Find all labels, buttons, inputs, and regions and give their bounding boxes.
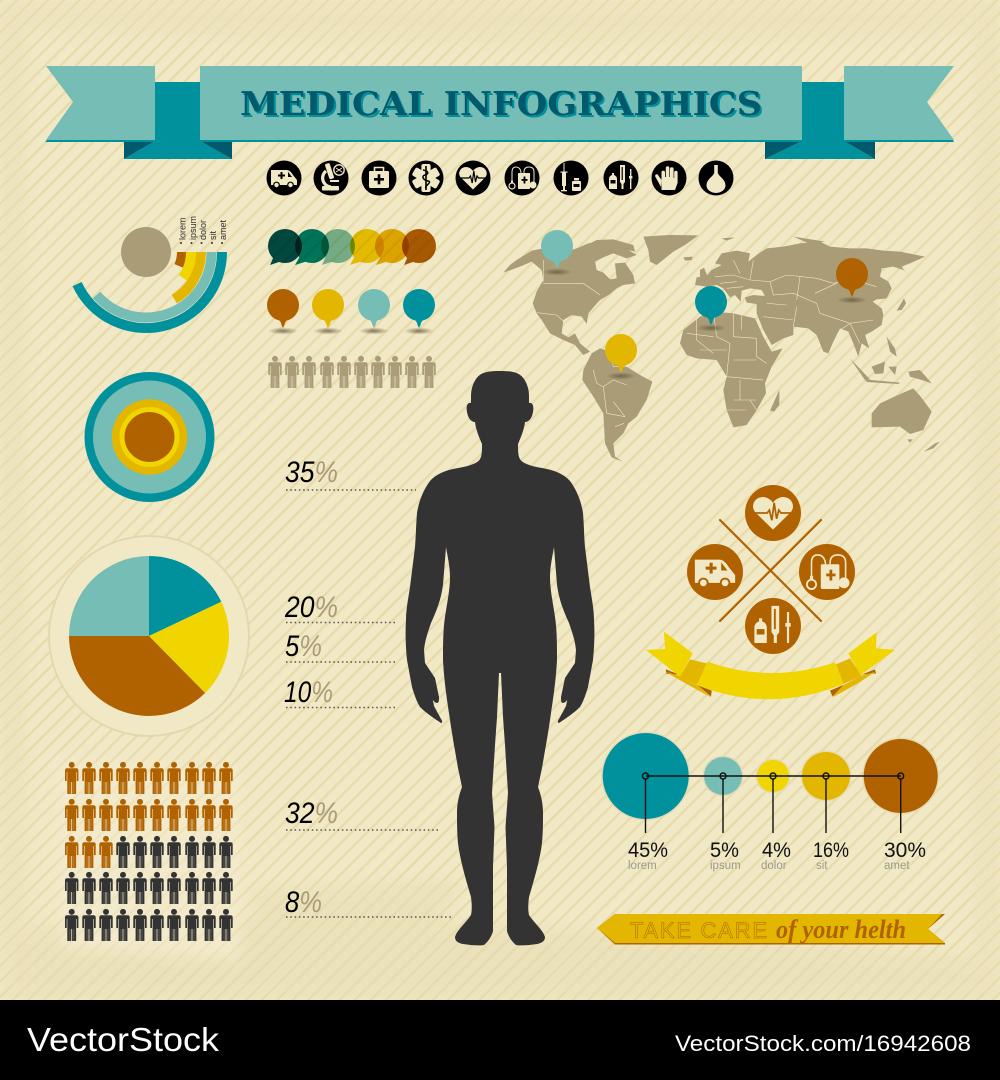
pin: light teal <box>358 289 390 335</box>
pin: yellow <box>312 289 344 335</box>
bubble comparison chart <box>601 732 939 872</box>
icon: bottles <box>604 160 638 196</box>
pin: africa <box>695 286 727 332</box>
south america <box>582 348 652 462</box>
africa <box>680 312 783 427</box>
arc: sit <box>97 252 212 317</box>
category labels: lorem <box>628 860 657 872</box>
icon: iv bag <box>799 544 855 600</box>
label 20%: 20% <box>284 591 338 624</box>
icon: heart <box>745 485 801 541</box>
yellow ribbon <box>646 632 895 699</box>
category labels: ipsum <box>710 860 741 872</box>
banner text: of your helth <box>776 915 906 944</box>
arc: ipsum <box>183 252 191 278</box>
bubble 4 <box>350 229 384 265</box>
icon: first aid kit <box>362 160 396 196</box>
footer logo: VectorStock <box>27 1022 219 1059</box>
greenland <box>643 235 698 265</box>
arc: dolor <box>174 252 201 299</box>
icon: bottles <box>745 598 801 654</box>
label 20% <box>284 591 396 624</box>
title text: MEDICAL INFOGRAPHICS <box>242 86 764 125</box>
footer url: VectorStock.com/16942608 <box>675 1031 971 1056</box>
values: 5% <box>710 839 739 862</box>
country borders <box>537 260 877 427</box>
arc labels <box>178 216 228 244</box>
label 10% <box>284 676 396 709</box>
slice: yellow <box>149 602 229 693</box>
cross lines <box>720 520 821 621</box>
pins row <box>267 289 435 335</box>
bubble: ipsum <box>702 756 744 796</box>
values: 16% <box>813 839 849 862</box>
radial arc chart <box>77 216 228 328</box>
eurasia <box>695 242 925 357</box>
chart hub <box>121 227 171 277</box>
body percentage labels <box>284 456 453 919</box>
pin: brown <box>267 289 299 335</box>
icon: ambulance <box>687 544 743 600</box>
right ribbon tail <box>844 66 954 142</box>
pin: north america <box>541 230 573 276</box>
title ribbon <box>45 66 954 159</box>
icon row <box>266 160 734 196</box>
label 5%: 5% <box>285 630 322 663</box>
speech bubbles <box>268 229 436 265</box>
title text: MEDICAL INFOGRAPHICS <box>240 84 762 123</box>
bubble: sit <box>800 750 852 802</box>
arc: amet <box>77 252 222 328</box>
label 35% <box>285 456 416 490</box>
slice: light teal <box>69 556 149 636</box>
category labels: sit <box>816 860 828 872</box>
slice: teal <box>149 556 221 636</box>
banner text: TAKE CARE <box>630 918 767 943</box>
label 10%: 10% <box>284 676 333 709</box>
category labels: amet <box>884 860 910 872</box>
pin: asia <box>836 258 868 304</box>
arc labels: lorem <box>178 217 188 240</box>
arc labels: dolor <box>198 220 208 240</box>
bubble: amet <box>862 738 939 814</box>
bubble: lorem <box>601 732 690 820</box>
human body silhouette <box>406 371 594 945</box>
icon: microscope <box>314 160 348 196</box>
icon: heart pulse <box>456 160 490 196</box>
arc labels: sit <box>208 231 218 240</box>
icon: ambulance <box>266 160 302 196</box>
banner text <box>630 915 906 944</box>
arc: lorem <box>179 252 182 266</box>
concentric circle chart <box>84 372 214 502</box>
bubble 6 <box>402 229 436 265</box>
ribbon back folds <box>124 82 875 159</box>
left ribbon tail <box>45 66 155 142</box>
connector lines <box>642 773 904 833</box>
icon: iv bag <box>504 160 540 196</box>
footer bar <box>0 1000 1000 1080</box>
world map <box>503 235 940 462</box>
arc labels: ipsum <box>188 216 198 240</box>
map pins <box>541 230 868 380</box>
icon: syringe <box>554 160 588 196</box>
take care banner <box>597 914 945 944</box>
arctic islands <box>580 239 635 255</box>
values: 30% <box>884 839 926 862</box>
pie chart <box>49 536 249 736</box>
icon: bulb <box>698 160 734 196</box>
australia <box>872 388 932 434</box>
values <box>628 839 926 862</box>
ribbon centre <box>200 66 802 142</box>
label 8%: 8% <box>285 886 322 919</box>
medical cross icon cluster <box>687 485 855 654</box>
label 5% <box>285 630 395 663</box>
slice: brown <box>69 636 205 716</box>
label 35%: 35% <box>285 456 338 489</box>
label 32%: 32% <box>285 797 338 830</box>
bubble 3 <box>321 229 355 265</box>
brown people <box>65 762 233 868</box>
bubble 5 <box>375 229 409 265</box>
values: 45% <box>628 839 668 862</box>
dark people <box>65 836 233 941</box>
bubble 2 <box>295 229 329 265</box>
category labels: dolor <box>761 860 787 872</box>
pin: south america <box>605 334 637 380</box>
values: 4% <box>762 839 791 862</box>
bubble: dolor <box>756 758 790 794</box>
pin: teal <box>403 289 435 335</box>
icon: hand <box>652 160 686 196</box>
bubble 1 <box>268 229 302 265</box>
icon: star of life <box>408 160 444 196</box>
people grid <box>65 762 233 941</box>
arc labels: amet <box>218 219 228 240</box>
north america <box>503 242 637 355</box>
people row <box>268 356 436 388</box>
category labels <box>628 860 910 872</box>
